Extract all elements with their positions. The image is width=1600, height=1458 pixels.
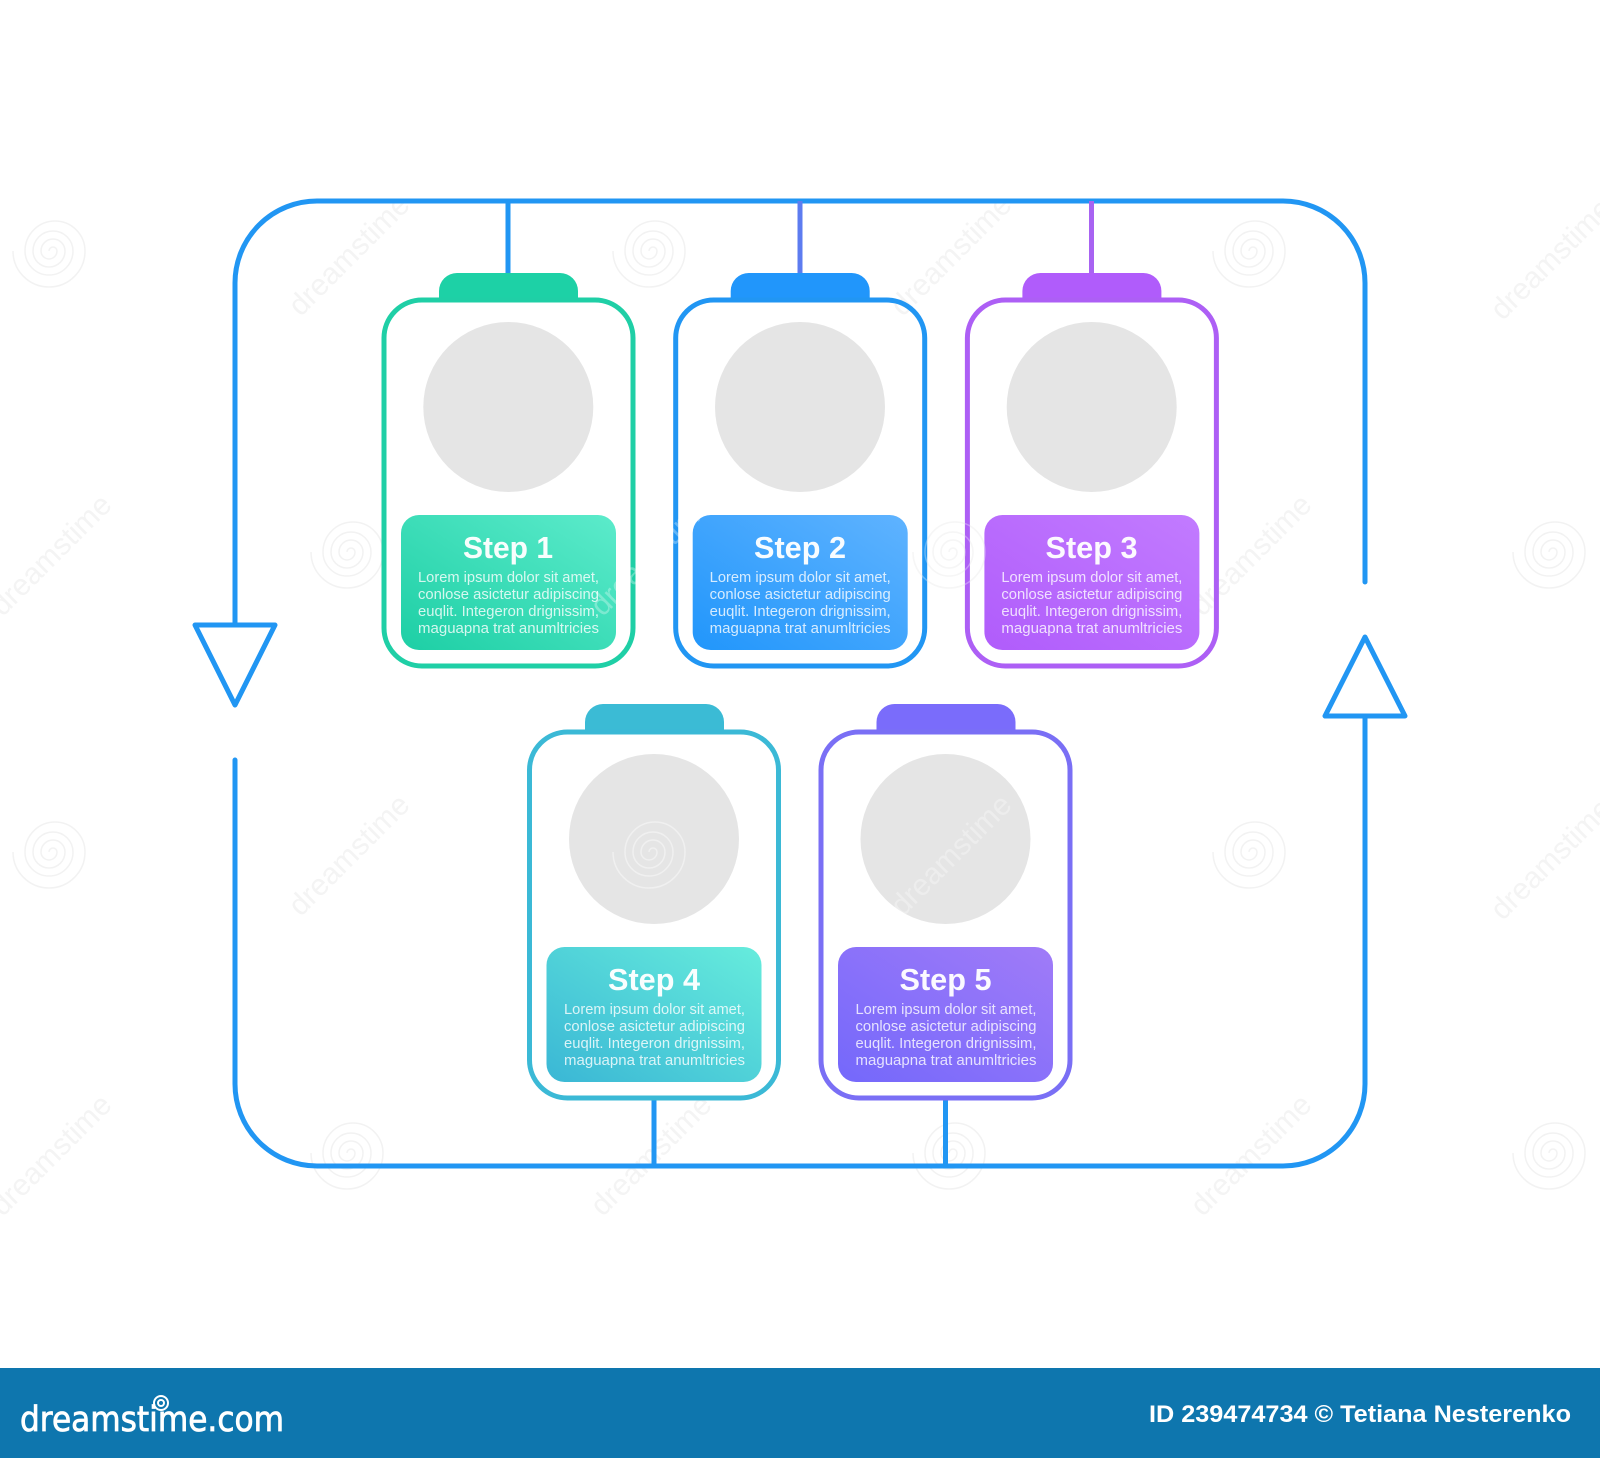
heading: Step 1 bbox=[463, 530, 553, 565]
body text: conlose asictetur adipiscing bbox=[564, 1019, 745, 1035]
body text: conlose asictetur adipiscing bbox=[856, 1019, 1036, 1035]
connector: step 4 bbox=[652, 1098, 656, 1166]
watermark layer: dreamstime bbox=[1184, 1088, 1318, 1222]
card outline bbox=[384, 300, 633, 666]
icon: logo spiral bbox=[154, 1396, 168, 1410]
watermark layer: dreamstime bbox=[884, 188, 1018, 322]
body text: maguapna trat anumltricies bbox=[1001, 621, 1182, 637]
cycle frame with arrows bbox=[195, 201, 1405, 1166]
tab bbox=[1022, 273, 1161, 300]
heading: Step 4 bbox=[608, 962, 701, 997]
text panel bbox=[401, 515, 616, 650]
heading: Step 5 bbox=[900, 962, 992, 997]
watermark layer: dreamstime bbox=[282, 788, 416, 922]
body text: conlose asictetur adipiscing bbox=[418, 587, 599, 603]
heading: Step 3 bbox=[1046, 530, 1138, 565]
watermark overlay on shapes: dreamstime bbox=[884, 788, 1018, 922]
body text: conlose asictetur adipiscing bbox=[1001, 587, 1182, 603]
body text: maguapna trat anumltricies bbox=[564, 1053, 745, 1069]
body text: euqlit. Integeron drignissim, bbox=[1001, 604, 1182, 620]
tab bbox=[731, 273, 870, 300]
heading: Step 2 bbox=[754, 530, 846, 565]
body text bbox=[710, 570, 891, 637]
body text bbox=[1001, 570, 1182, 637]
tab bbox=[876, 704, 1016, 732]
panel: step 2 bbox=[676, 273, 925, 666]
card outline bbox=[530, 732, 778, 1098]
panel: step 3 bbox=[967, 273, 1216, 666]
body text: Lorem ipsum dolor sit amet, bbox=[564, 1002, 745, 1018]
text panel bbox=[984, 515, 1199, 650]
panel: step 4 bbox=[530, 704, 778, 1098]
body text: Lorem ipsum dolor sit amet, bbox=[710, 570, 891, 586]
image placeholder bbox=[423, 322, 593, 492]
footer credit: ID 239474734 © Tetiana Nesterenko bbox=[1149, 1401, 1571, 1428]
body text: Lorem ipsum dolor sit amet, bbox=[856, 1002, 1036, 1018]
body text: conlose asictetur adipiscing bbox=[710, 587, 891, 603]
watermark layer: dreamstime bbox=[584, 1088, 718, 1222]
watermark overlay on shapes bbox=[584, 488, 1018, 922]
body text: maguapna trat anumltricies bbox=[710, 621, 891, 637]
frame upper line bbox=[235, 201, 1365, 625]
body text bbox=[564, 1002, 745, 1069]
image placeholder bbox=[715, 322, 885, 492]
panel: step 5 bbox=[821, 704, 1070, 1098]
connector: step 2 bbox=[798, 201, 802, 275]
body text: maguapna trat anumltricies bbox=[856, 1053, 1036, 1069]
tab bbox=[585, 704, 724, 732]
text panel bbox=[838, 947, 1053, 1082]
card outline bbox=[821, 732, 1070, 1098]
footer bar bbox=[0, 1368, 1600, 1458]
connector: step 5 bbox=[943, 1098, 948, 1166]
image placeholder bbox=[1007, 322, 1177, 492]
card outline bbox=[967, 300, 1216, 666]
image placeholder bbox=[860, 754, 1030, 924]
watermark layer bbox=[0, 188, 1600, 1222]
image placeholder bbox=[569, 754, 739, 924]
footer logo: dreamstime.com bbox=[20, 1400, 284, 1440]
text panel bbox=[693, 515, 908, 650]
watermark overlay on shapes: dreamstime bbox=[584, 488, 718, 622]
watermark layer: dreamstime bbox=[1184, 488, 1318, 622]
watermark layer: dreamstime bbox=[282, 188, 416, 322]
body text: maguapna trat anumltricies bbox=[418, 621, 599, 637]
text panel bbox=[546, 947, 762, 1082]
body text: euqlit. Integeron drignissim, bbox=[418, 604, 599, 620]
frame lower line bbox=[235, 716, 1365, 1166]
connector: step 3 bbox=[1089, 201, 1094, 275]
body text: euqlit. Integeron drignissim, bbox=[564, 1036, 745, 1052]
body text bbox=[418, 570, 599, 637]
card outline bbox=[676, 300, 925, 666]
body text: euqlit. Integeron drignissim, bbox=[710, 604, 891, 620]
body text bbox=[856, 1002, 1036, 1069]
body text: euqlit. Integeron drignissim, bbox=[856, 1036, 1036, 1052]
body text: Lorem ipsum dolor sit amet, bbox=[1001, 570, 1182, 586]
panel: step 1 bbox=[384, 273, 633, 666]
arrow: down triangle bbox=[195, 625, 275, 705]
connector: step 1 bbox=[506, 201, 510, 275]
arrow: up triangle bbox=[1325, 637, 1405, 716]
body text: Lorem ipsum dolor sit amet, bbox=[418, 570, 599, 586]
tab bbox=[439, 273, 578, 300]
